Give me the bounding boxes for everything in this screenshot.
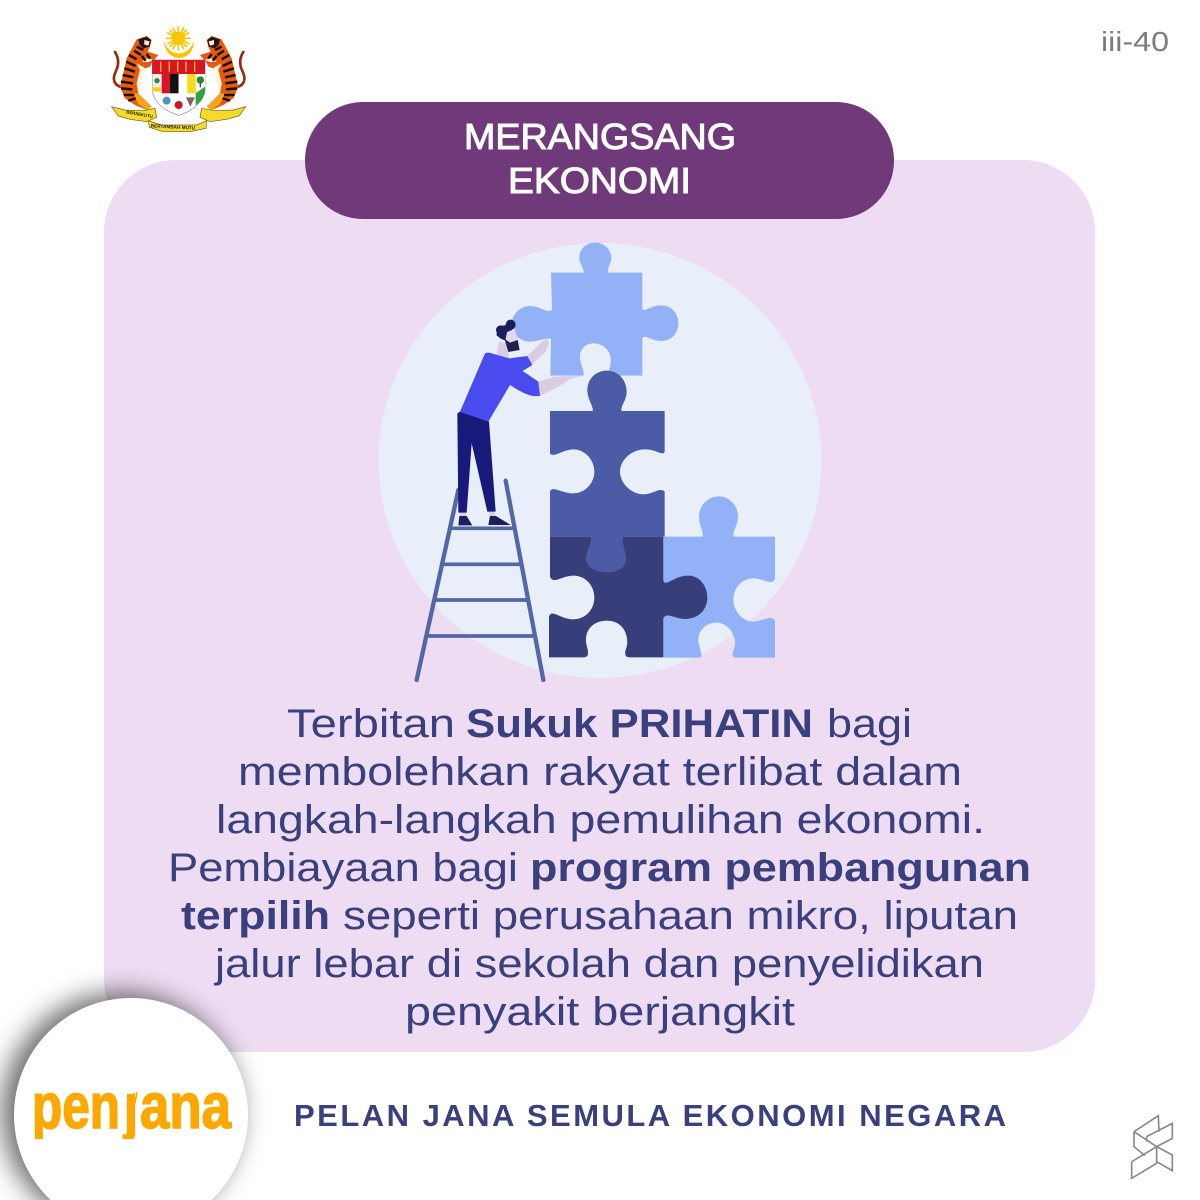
puzzle piece: middle indigo bbox=[550, 371, 665, 572]
text block: description: seperti perusahaan mikro, liputan bbox=[343, 894, 1018, 938]
icon: publisher mark bbox=[1132, 1116, 1172, 1178]
face bbox=[503, 329, 519, 347]
panel: main lilac card bbox=[104, 160, 1095, 1052]
background circle bbox=[378, 243, 822, 678]
text block: description: program pembangunan bbox=[530, 846, 1031, 890]
text block: description bbox=[168, 702, 1031, 1034]
footer tagline: PELAN JANA SEMULA EKONOMI NEGARA bbox=[294, 1098, 1006, 1133]
logo wordmark: ana bbox=[140, 1070, 231, 1142]
logo wordmark: pen bbox=[32, 1070, 120, 1142]
legs bbox=[457, 412, 496, 513]
icon: crescent and sun bbox=[164, 26, 194, 58]
logo wordmark bbox=[34, 1092, 232, 1139]
text block: description: bagi bbox=[827, 702, 912, 746]
puzzle piece: lower dark navy bbox=[549, 537, 707, 657]
puzzle piece: top light blue bbox=[512, 243, 678, 376]
text block: description: Pembiayaan bagi bbox=[168, 846, 518, 890]
title pill bbox=[305, 102, 894, 219]
icon: yellow motto ribbon bbox=[112, 107, 246, 132]
icon: Malaysian coat of arms bbox=[112, 26, 246, 132]
page number: iii-40 bbox=[1101, 26, 1169, 57]
illustration: man on ladder assembling puzzle bbox=[378, 243, 822, 680]
hair bbox=[496, 320, 516, 341]
icon: yellow motto ribbon: BERSEKUTU bbox=[126, 109, 153, 119]
text block: description: terpilih bbox=[181, 894, 330, 938]
shirt bbox=[460, 353, 540, 422]
heading: MERANGSANG bbox=[464, 116, 736, 157]
text block: description: langkah-langkah pemulihan ekonomi. bbox=[216, 798, 985, 842]
icon: shield bbox=[152, 60, 205, 115]
icon: yellow motto ribbon: BERTAMBAH MUTU bbox=[151, 123, 196, 131]
heading bbox=[464, 116, 736, 201]
text block: description: Sukuk PRIHATIN bbox=[466, 702, 813, 746]
ankles bbox=[460, 512, 495, 517]
beard bbox=[504, 339, 520, 352]
logo wordmark: j bbox=[123, 1070, 138, 1142]
shoes bbox=[458, 516, 511, 525]
text block: description: penyakit berjangkit bbox=[405, 990, 795, 1034]
text block: description: membolehkan rakyat terlibat dalam bbox=[238, 750, 962, 794]
man bbox=[457, 320, 583, 525]
icon: left tiger bbox=[114, 36, 158, 110]
text block: description: Terbitan bbox=[287, 702, 455, 746]
arms and neck bbox=[496, 338, 583, 396]
puzzle piece: lower right light blue bbox=[663, 496, 775, 658]
text block: description: jalur lebar di sekolah dan penyelidikan bbox=[214, 942, 984, 986]
icon: right tiger bbox=[200, 36, 244, 110]
heading: EKONOMI bbox=[508, 160, 691, 201]
ladder bbox=[417, 481, 543, 680]
badge: Penjana logo circle bbox=[2, 993, 248, 1200]
